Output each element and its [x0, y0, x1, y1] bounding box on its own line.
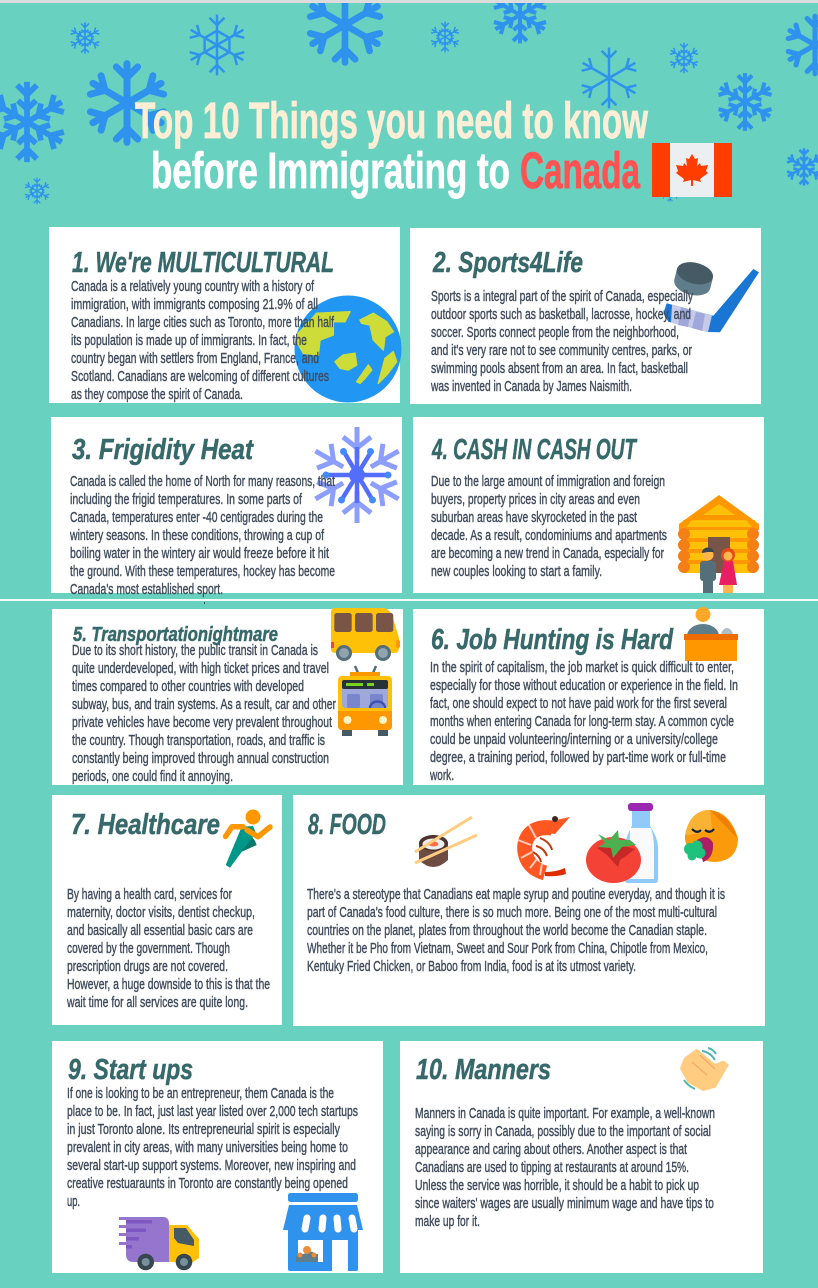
body text [72, 642, 336, 785]
body text: the country. Though transportation, roads, and traffic is [72, 732, 325, 749]
heading: 10. Manners [416, 1054, 551, 1086]
card background [52, 795, 282, 1025]
body text: However, a huge downside to this is that the [67, 976, 270, 993]
body text: Sports is a integral part of the spirit of Canada, especially [431, 288, 693, 305]
icon: snowflake 9 [786, 16, 818, 74]
icon: Canadian flag [652, 143, 732, 197]
heading: 1. We're MULTICULTURAL [72, 247, 334, 279]
body text: Canadians. In large cities such as Toronto, more than half [71, 314, 335, 331]
icon: snowflake 7 [669, 43, 699, 73]
top edge strip [0, 0, 818, 3]
heading: 2. Sports4Life [432, 247, 583, 279]
icon: snowflake 1 [70, 22, 100, 54]
body text: buyers, property prices in city areas and even [431, 491, 640, 508]
icon: snowflake 11 [0, 82, 67, 162]
icon: blue snowflake [308, 427, 406, 523]
body text: several start-up support systems. Moreover, new inspiring and [67, 1157, 356, 1174]
panel 6: job hunting [413, 607, 764, 785]
card background [293, 795, 765, 1026]
body text: Canada's most established sport. [70, 581, 223, 598]
icon: globe [294, 296, 402, 402]
body text: periods, one could find it annoying. [72, 768, 233, 785]
body text: its population is made up of immigrants. In fact, the [71, 332, 307, 349]
panel 1: multicultural [49, 227, 402, 403]
body text: country began with settlers from England, France, and [71, 350, 319, 367]
snowflake background [0, 0, 818, 204]
icon: snowflake 2 [187, 15, 247, 75]
panel 4: cash in cash out [413, 417, 764, 593]
panel 9: start ups [52, 1041, 383, 1273]
body text [431, 473, 667, 580]
body text: If one is looking to be an entrepreneur, them Canada is the [67, 1085, 334, 1102]
body text: Due to the large amount of immigration and foreign [431, 473, 665, 490]
title line 2 white: before Immigrating to [151, 142, 510, 199]
icon: snowflake 8 [716, 73, 774, 131]
icon: shrimp [518, 816, 570, 876]
body text [430, 288, 693, 395]
panel 8: food [293, 795, 765, 1026]
body text: Canadians are used to tipping at restaurants at around 15%. [415, 1159, 689, 1176]
icon: storefront [283, 1193, 363, 1271]
panel 7: healthcare [52, 795, 282, 1025]
body text: prescription drugs are not covered. [67, 958, 228, 975]
panel 2: sports [410, 228, 761, 404]
icon: runner [226, 810, 270, 868]
icon: delivery truck [119, 1217, 199, 1270]
body text [66, 886, 270, 1011]
panel 3: frigidity heat [51, 417, 406, 598]
heading: 4. CASH IN CASH OUT [431, 434, 637, 466]
body text: outdoor sports such as basketball, lacrosse, hockey, and [431, 306, 691, 323]
heading: 5. Transportationightmare [73, 624, 278, 646]
body text: Canada is a relatively young country with a history of [71, 278, 315, 295]
icon: yellow bus [331, 608, 400, 661]
body text: soccer. Sports connect people from the neighborhood, [431, 324, 679, 341]
icon: sick face emoji [684, 810, 738, 862]
body text: Unless the service was horrible, it should be a habit to pick up [415, 1177, 699, 1194]
body text: quite underdeveloped, with high ticket prices and travel [72, 660, 329, 677]
body text: are becoming a new trend in Canada, especially for [431, 545, 664, 562]
body text: Canada is called the home of North for many reasons, that [70, 473, 336, 490]
body text: work. [429, 767, 454, 784]
icon: log cabin with couple [678, 495, 759, 593]
body text: was invented in Canada by James Naismith. [430, 378, 632, 395]
body text: and it's very rare not to see community centres, parks, or [431, 342, 692, 359]
body text: the ground. With these temperatures, hockey has become [70, 563, 335, 580]
card background [413, 609, 764, 785]
body text [69, 473, 336, 598]
card background [52, 1041, 383, 1273]
card background [413, 417, 764, 593]
body text: maternity, doctor visits, dentist checkup, [67, 904, 255, 921]
horizontal white band [0, 599, 818, 601]
icon: snowflake 10 [786, 148, 818, 186]
heading: 6. Job Hunting is Hard [431, 624, 674, 656]
body text: creative restuaraunts in Toronto are constantly being opened [67, 1175, 348, 1192]
heading: 3. Frigidity Heat [72, 434, 254, 466]
icon: snowflake 12 [88, 64, 166, 142]
icon: trolley bus [338, 666, 392, 736]
card background [49, 227, 400, 403]
card background [410, 228, 761, 404]
icon: reception desk [684, 607, 738, 661]
icon: snowflake 5 [492, 0, 548, 43]
heading: 9. Start ups [68, 1054, 193, 1086]
icon: tomato [586, 830, 641, 883]
body text: Kentuky Fried Chicken, or Baboo from India, food is at its utmost variety. [307, 958, 636, 975]
body text: place to be. In fact, just last year listed over 2,000 tech startups [67, 1103, 358, 1120]
icon: snowflake 6 [579, 48, 639, 108]
body text: up. [67, 1193, 80, 1210]
heading: 8. FOOD [308, 809, 386, 841]
body text [307, 886, 725, 975]
icon: snowflake 13 [24, 178, 50, 204]
body text: as they compose the spirit of Canada. [71, 386, 243, 403]
body text: private vehicles have become very prevalent throughout [72, 714, 333, 731]
icon: waving hand [681, 1048, 728, 1090]
icon: snowflake 14 [660, 182, 680, 202]
icon: snowflake 3 [308, 0, 382, 62]
card background [51, 417, 402, 593]
body text: immigration, with immigrants composing 21.9% of all [71, 296, 318, 313]
body text [429, 659, 738, 784]
body text: Scotland. Canadians are welcoming of different cultures [71, 368, 329, 385]
body text [67, 1085, 358, 1210]
icon: hockey stick and puck [663, 259, 759, 332]
panel 5: transportation [52, 608, 403, 785]
title word Canada: Canada [520, 142, 640, 199]
body text [71, 278, 335, 403]
icon: milk bottle [625, 803, 658, 883]
body text: including the frigid temperatures. In some parts of [70, 491, 303, 508]
panel 10: manners [400, 1041, 763, 1273]
body text: times compared to other countries with developed [72, 678, 304, 695]
stray text tick [204, 602, 205, 604]
body text: in just Toronto alone. Its entrepreneurial spirit is especially [67, 1121, 340, 1138]
body text: appearance and caring about others. Another aspect is that [415, 1141, 688, 1158]
body text: swimming pools absent from an area. In fact, basketball [431, 360, 688, 377]
title [135, 92, 648, 199]
body text: subway, bus, and train systems. As a result, car and other [72, 696, 336, 713]
body text: constantly being improved through annual construction [72, 750, 329, 767]
body text: wait time for all services are quite long. [66, 994, 248, 1011]
card background [52, 609, 403, 785]
heading: 7. Healthcare [71, 809, 220, 841]
body text: decade. As a result, condominiums and apartments [431, 527, 667, 544]
body text: suburban areas have skyrocketed in the past [431, 509, 638, 526]
body text: and basically all essential basic cars are [67, 922, 253, 939]
body text: prevalent in city areas, with many universities being home to [67, 1139, 348, 1156]
body text: Canada, temperatures enter -40 centigrades during the [70, 509, 323, 526]
body text: make up for it. [415, 1213, 480, 1230]
body text: Due to its short history, the public transit in Canada is [72, 642, 318, 659]
icon: snowflake 4 [430, 22, 460, 52]
card background [400, 1041, 763, 1273]
icon: sushi with chopsticks [415, 817, 477, 867]
body text: wintery seasons. In these conditions, throwing a cup of [69, 527, 325, 544]
body text: new couples looking to start a family. [431, 563, 602, 580]
body text: By having a health card, services for [67, 886, 232, 903]
body text: covered by the government. Though [67, 940, 230, 957]
body text: boiling water in the wintery air would freeze before it hit [70, 545, 330, 562]
body text [415, 1105, 715, 1230]
